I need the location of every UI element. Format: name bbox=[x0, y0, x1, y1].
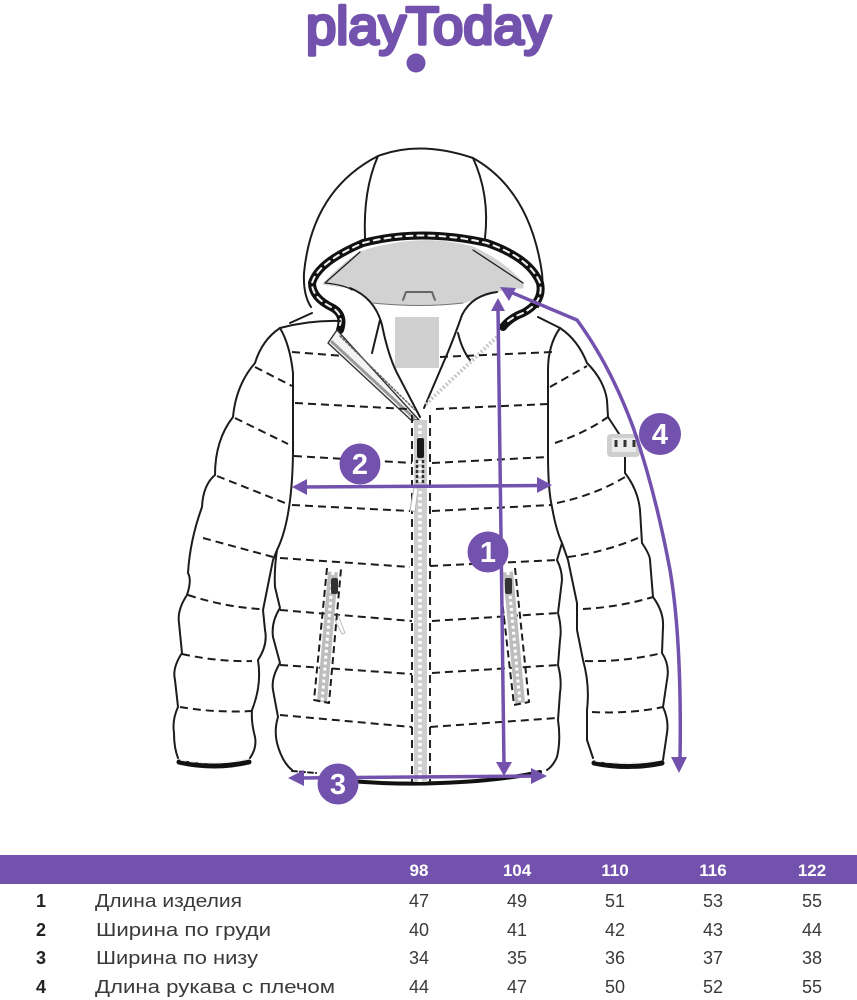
right shoulder and sleeve bbox=[538, 317, 668, 760]
row 4: 44 bbox=[409, 977, 429, 997]
hood lining bbox=[323, 241, 523, 306]
left pocket bbox=[314, 568, 345, 703]
row 2: 43 bbox=[703, 920, 723, 940]
row 2: Ширина по груди bbox=[96, 920, 271, 940]
row 3 bbox=[36, 948, 822, 968]
table header bbox=[0, 855, 857, 884]
table header: 116 bbox=[699, 861, 727, 880]
right cuff bbox=[594, 760, 662, 766]
row 3: 38 bbox=[802, 948, 822, 968]
row 3: 34 bbox=[409, 948, 429, 968]
body left side bbox=[273, 550, 292, 770]
row 4: 47 bbox=[507, 977, 527, 997]
measurement 2: chest width arrow: 2 bbox=[352, 449, 368, 481]
table header: 122 bbox=[798, 861, 826, 880]
measurement 3: hem width arrow: 3 bbox=[330, 769, 346, 801]
row 1 bbox=[36, 891, 822, 911]
row 1: 51 bbox=[605, 891, 625, 911]
row 3: 3 bbox=[36, 948, 46, 968]
row 2: 42 bbox=[605, 920, 625, 940]
center zipper bbox=[410, 415, 430, 782]
row 1: 1 bbox=[36, 891, 46, 911]
table header: 104 bbox=[503, 861, 532, 880]
row 3: 37 bbox=[703, 948, 723, 968]
size table bbox=[0, 855, 857, 997]
table header: 110 bbox=[601, 861, 629, 880]
hood trim band bbox=[312, 236, 541, 330]
measurement 4: sleeve length arrow: 4 bbox=[652, 419, 668, 451]
row 1: 53 bbox=[703, 891, 723, 911]
row 2 bbox=[36, 920, 822, 940]
row 2: 40 bbox=[409, 920, 429, 940]
row 3: Ширина по низу bbox=[96, 948, 258, 968]
zipper slider bbox=[417, 438, 424, 458]
measurement 1: length arrow: 1 bbox=[480, 537, 496, 569]
row 4: 55 bbox=[802, 977, 822, 997]
collar lines bbox=[350, 288, 497, 417]
hood bbox=[304, 148, 542, 330]
quilting dashes bbox=[180, 352, 663, 727]
table header: 98 bbox=[410, 861, 428, 880]
row 1: 55 bbox=[802, 891, 822, 911]
measurement 4: sleeve length arrow bbox=[500, 287, 687, 773]
row 4: 4 bbox=[36, 977, 46, 997]
jacket technical drawing bbox=[174, 148, 668, 784]
row 4: 52 bbox=[703, 977, 723, 997]
row 4: Длина рукава с плечом bbox=[95, 977, 335, 997]
row 1: Длина изделия bbox=[95, 891, 242, 911]
row 1: 49 bbox=[507, 891, 527, 911]
row 3: 36 bbox=[605, 948, 625, 968]
left cuff bbox=[179, 759, 249, 766]
neck label bbox=[395, 317, 439, 368]
left placket bbox=[328, 330, 419, 420]
measurement 1: length arrow bbox=[468, 298, 512, 776]
row 2: 2 bbox=[36, 920, 46, 940]
zipper pull bbox=[410, 488, 418, 512]
right placket bbox=[425, 337, 497, 405]
hanger loop bbox=[403, 292, 435, 300]
row 4 bbox=[36, 977, 822, 997]
sleeve tag bbox=[607, 434, 640, 457]
row 3: 35 bbox=[507, 948, 527, 968]
right pocket bbox=[502, 568, 529, 705]
row 1: 47 bbox=[409, 891, 429, 911]
row 2: 44 bbox=[802, 920, 822, 940]
hem band bbox=[292, 771, 540, 784]
row 2: 41 bbox=[507, 920, 527, 940]
row 4: 50 bbox=[605, 977, 625, 997]
measurement 3: hem width arrow bbox=[288, 764, 547, 804]
left shoulder and sleeve bbox=[174, 313, 340, 758]
measurement 2: chest width arrow bbox=[292, 444, 552, 495]
